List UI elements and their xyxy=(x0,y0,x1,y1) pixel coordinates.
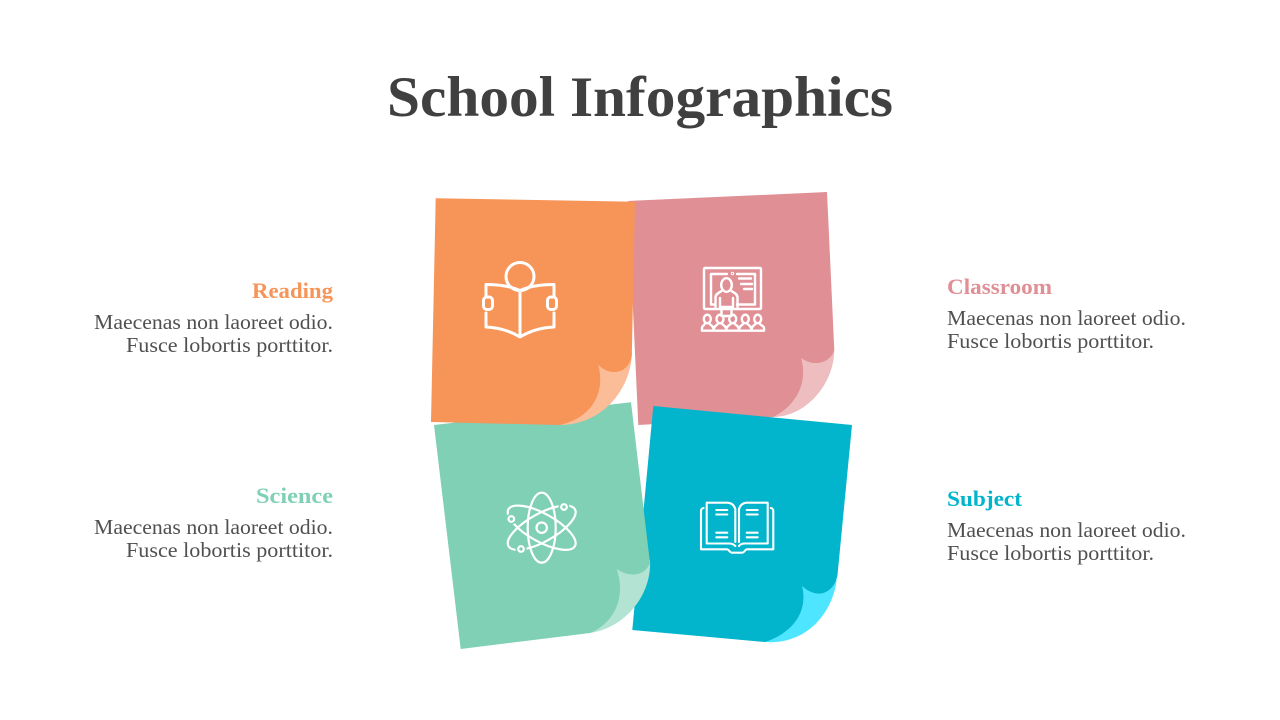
text block: reading: Reading xyxy=(252,278,333,303)
text block: classroom: Fusce lobortis porttitor. xyxy=(947,329,1154,353)
text block: science: Fusce lobortis porttitor. xyxy=(126,538,333,562)
text block: subject: Subject xyxy=(947,486,1023,511)
text block: science xyxy=(94,483,333,562)
title: School Infographics xyxy=(387,66,893,129)
panel: classroom note xyxy=(628,192,834,425)
panel: science note xyxy=(434,402,650,649)
text block: classroom: Classroom xyxy=(947,274,1052,299)
panel: subject note xyxy=(632,406,852,642)
text block: reading: Maecenas non laoreet odio. xyxy=(94,310,333,334)
text block: science: Science xyxy=(256,483,333,508)
panel: reading note xyxy=(431,198,635,425)
text block: reading: Fusce lobortis porttitor. xyxy=(126,333,333,357)
text block: science: Maecenas non laoreet odio. xyxy=(94,515,333,539)
icon: atom xyxy=(502,493,582,563)
text block: subject: Fusce lobortis porttitor. xyxy=(947,541,1154,565)
text block: reading xyxy=(94,278,333,357)
icon: classroom xyxy=(702,268,764,331)
text block: classroom xyxy=(947,274,1186,353)
icon: open book xyxy=(701,503,773,553)
text block: subject xyxy=(947,486,1186,565)
icon: reading person xyxy=(484,262,556,337)
text block: subject: Maecenas non laoreet odio. xyxy=(947,518,1186,542)
text block: classroom: Maecenas non laoreet odio. xyxy=(947,306,1186,330)
